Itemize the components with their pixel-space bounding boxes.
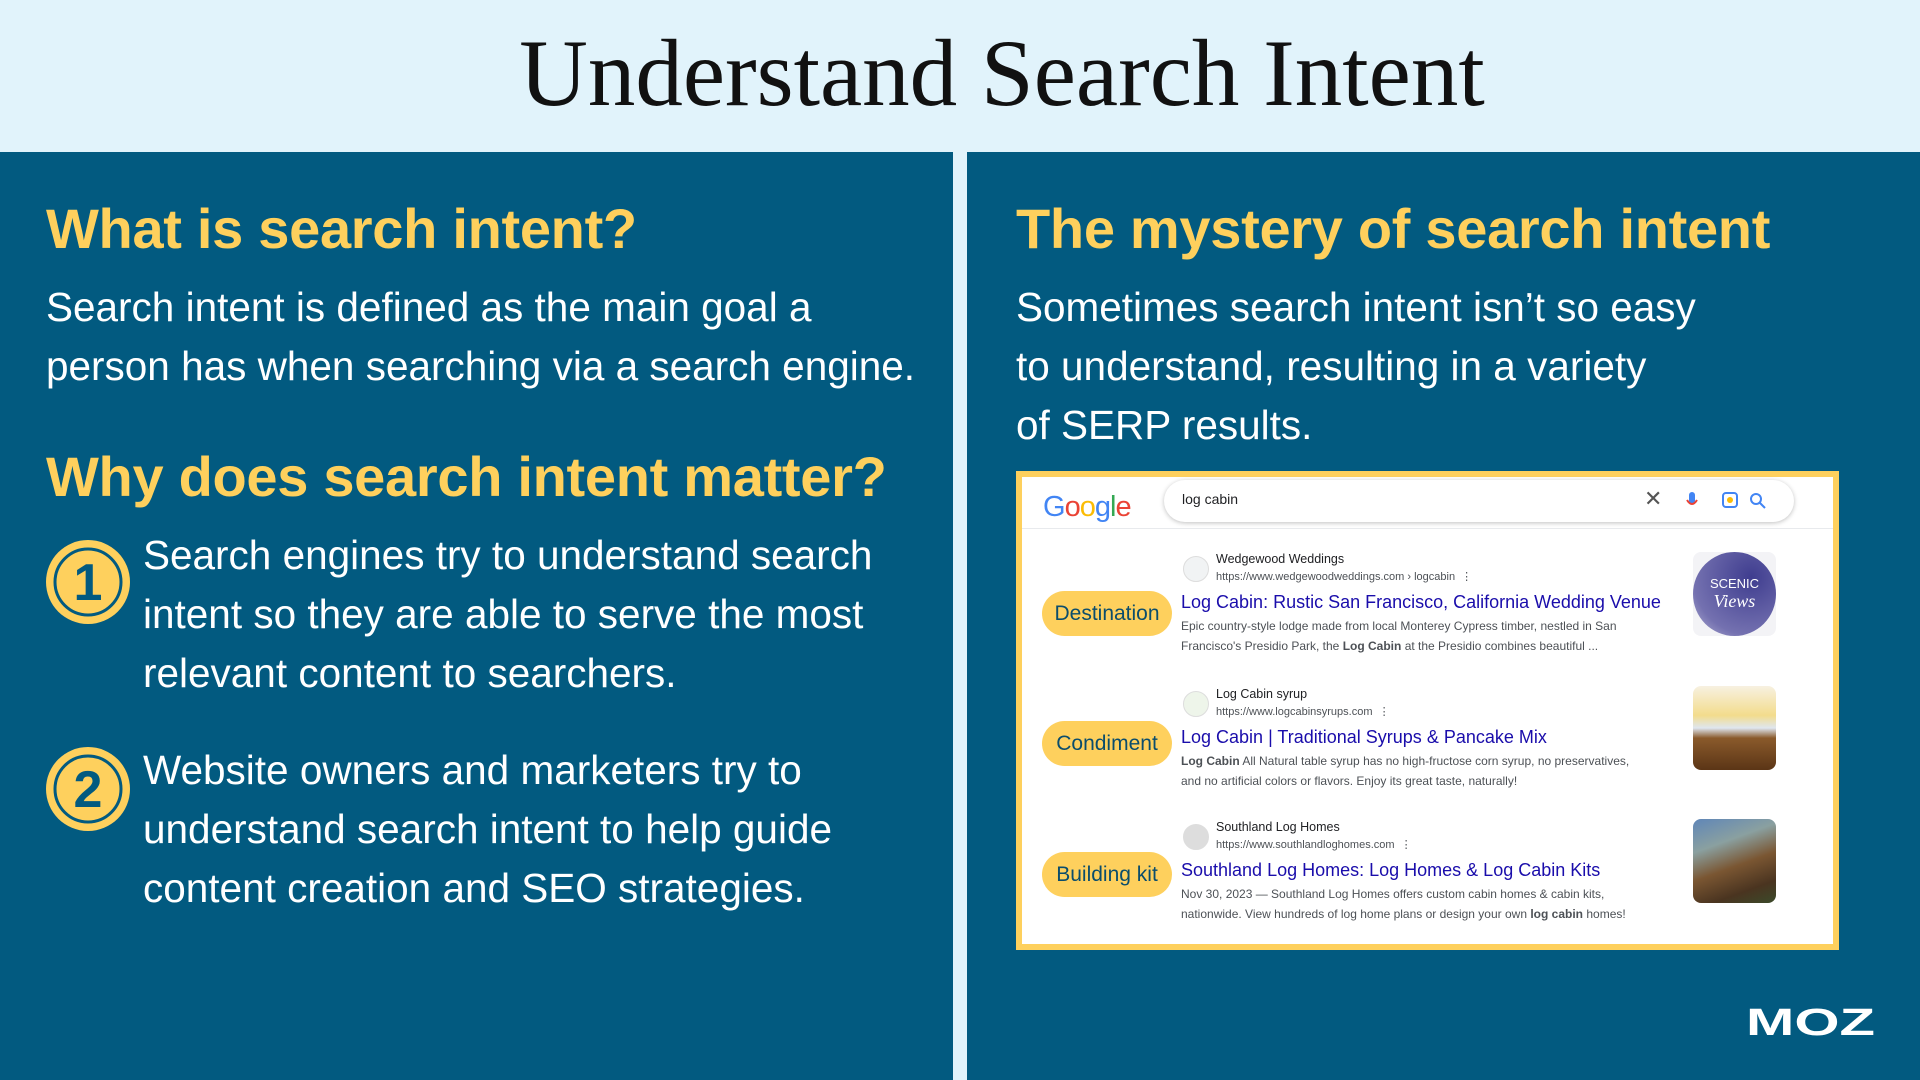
pill: condiment (1042, 721, 1172, 766)
pill: destination: Destination (1054, 602, 1160, 625)
result 2: and no artificial colors or flavors. Enjoy its great taste, naturally! (1181, 774, 1517, 788)
panel: left (46, 197, 915, 911)
text: mystery: to understand, resulting in a variety (1016, 343, 1646, 389)
heading: what is search intent: What is search intent? (46, 197, 637, 260)
search bar: log cabin (1182, 491, 1238, 507)
result 3: Nov 30, 2023 — Southland Log Homes offers custom cabin homes & cabin kits, (1181, 887, 1604, 901)
result 1: Francisco's Presidio Park, the Log Cabin at the Presidio combines beautiful ... (1181, 639, 1598, 653)
result 1: Epic country-style lodge made from local Monterey Cypress timber, nestled in San (1181, 619, 1617, 633)
result 3: nationwide. View hundreds of log home plans or design your own log cabin homes! (1181, 907, 1626, 921)
icon: number 2: 2 (74, 761, 102, 819)
result 2: https://www.logcabinsyrups.com ⋮ (1216, 706, 1390, 718)
title: Understand Search Intent (519, 20, 1485, 126)
pill: building kit: Building kit (1056, 863, 1158, 886)
heading: why does it matter: Why does search intent matter? (46, 445, 887, 508)
thumbnail: scenic views (1693, 552, 1776, 636)
google logo: Google (1043, 491, 1131, 523)
result 3: https://www.southlandloghomes.com ⋮ (1216, 839, 1412, 851)
search bar (1164, 480, 1794, 522)
panel: right (1016, 197, 1770, 448)
text: item 1: intent so they are able to serve the most (143, 591, 863, 637)
text: definition: person has when searching via a search engine. (46, 343, 915, 389)
pill: destination (1042, 591, 1172, 636)
text: mystery: of SERP results. (1016, 402, 1312, 448)
text: item 2 (143, 747, 832, 911)
thumbnail: scenic views: SCENIC (1710, 576, 1759, 591)
result 3 (1181, 820, 1626, 921)
pill: building kit (1042, 852, 1172, 897)
text: item 2: content creation and SEO strategies. (143, 865, 805, 911)
text: mystery: Sometimes search intent isn’t so easy (1016, 284, 1696, 330)
divider (953, 152, 967, 1080)
text: definition (46, 284, 915, 389)
text: mystery (1016, 284, 1696, 448)
result 1: Log Cabin: Rustic San Francisco, California Wedding Venue (1181, 592, 1661, 612)
result 2: Log Cabin syrup (1216, 687, 1307, 701)
text: item 1: relevant content to searchers. (143, 650, 677, 696)
result 3: Southland Log Homes (1216, 820, 1340, 834)
result 1 (1181, 552, 1661, 653)
result 3: Southland Log Homes: Log Homes & Log Cabin Kits (1181, 860, 1600, 880)
pill: condiment: Condiment (1056, 732, 1158, 755)
thumbnail: scenic views: Views (1714, 591, 1755, 611)
search bar: ✕ (1644, 486, 1662, 511)
result 1: Wedgewood Weddings (1216, 552, 1344, 566)
screenshot: google serp (1016, 471, 1839, 950)
icon: number 2 (46, 747, 130, 831)
heading: mystery: The mystery of search intent (1016, 197, 1770, 260)
result 2: Log Cabin | Traditional Syrups & Pancake Mix (1181, 727, 1547, 747)
text: item 2: understand search intent to help guide (143, 806, 832, 852)
icon: number 1 (46, 540, 130, 624)
text: item 1 (143, 532, 872, 696)
thumbnail: syrup (1693, 686, 1776, 770)
item 2 (46, 747, 832, 911)
thumbnail: log home (1693, 819, 1776, 903)
text: item 2: Website owners and marketers try to (143, 747, 802, 793)
icon: number 1: 1 (74, 554, 102, 612)
text: item 1: Search engines try to understand search (143, 532, 872, 578)
item 1 (46, 532, 872, 696)
result 2: Log Cabin All Natural table syrup has no high-fructose corn syrup, no preservatives, (1181, 754, 1629, 768)
result 2 (1181, 687, 1629, 788)
header band (0, 0, 1920, 152)
text: definition: Search intent is defined as the main goal a (46, 284, 812, 330)
result 1: https://www.wedgewoodweddings.com › logcabin ⋮ (1216, 571, 1472, 583)
